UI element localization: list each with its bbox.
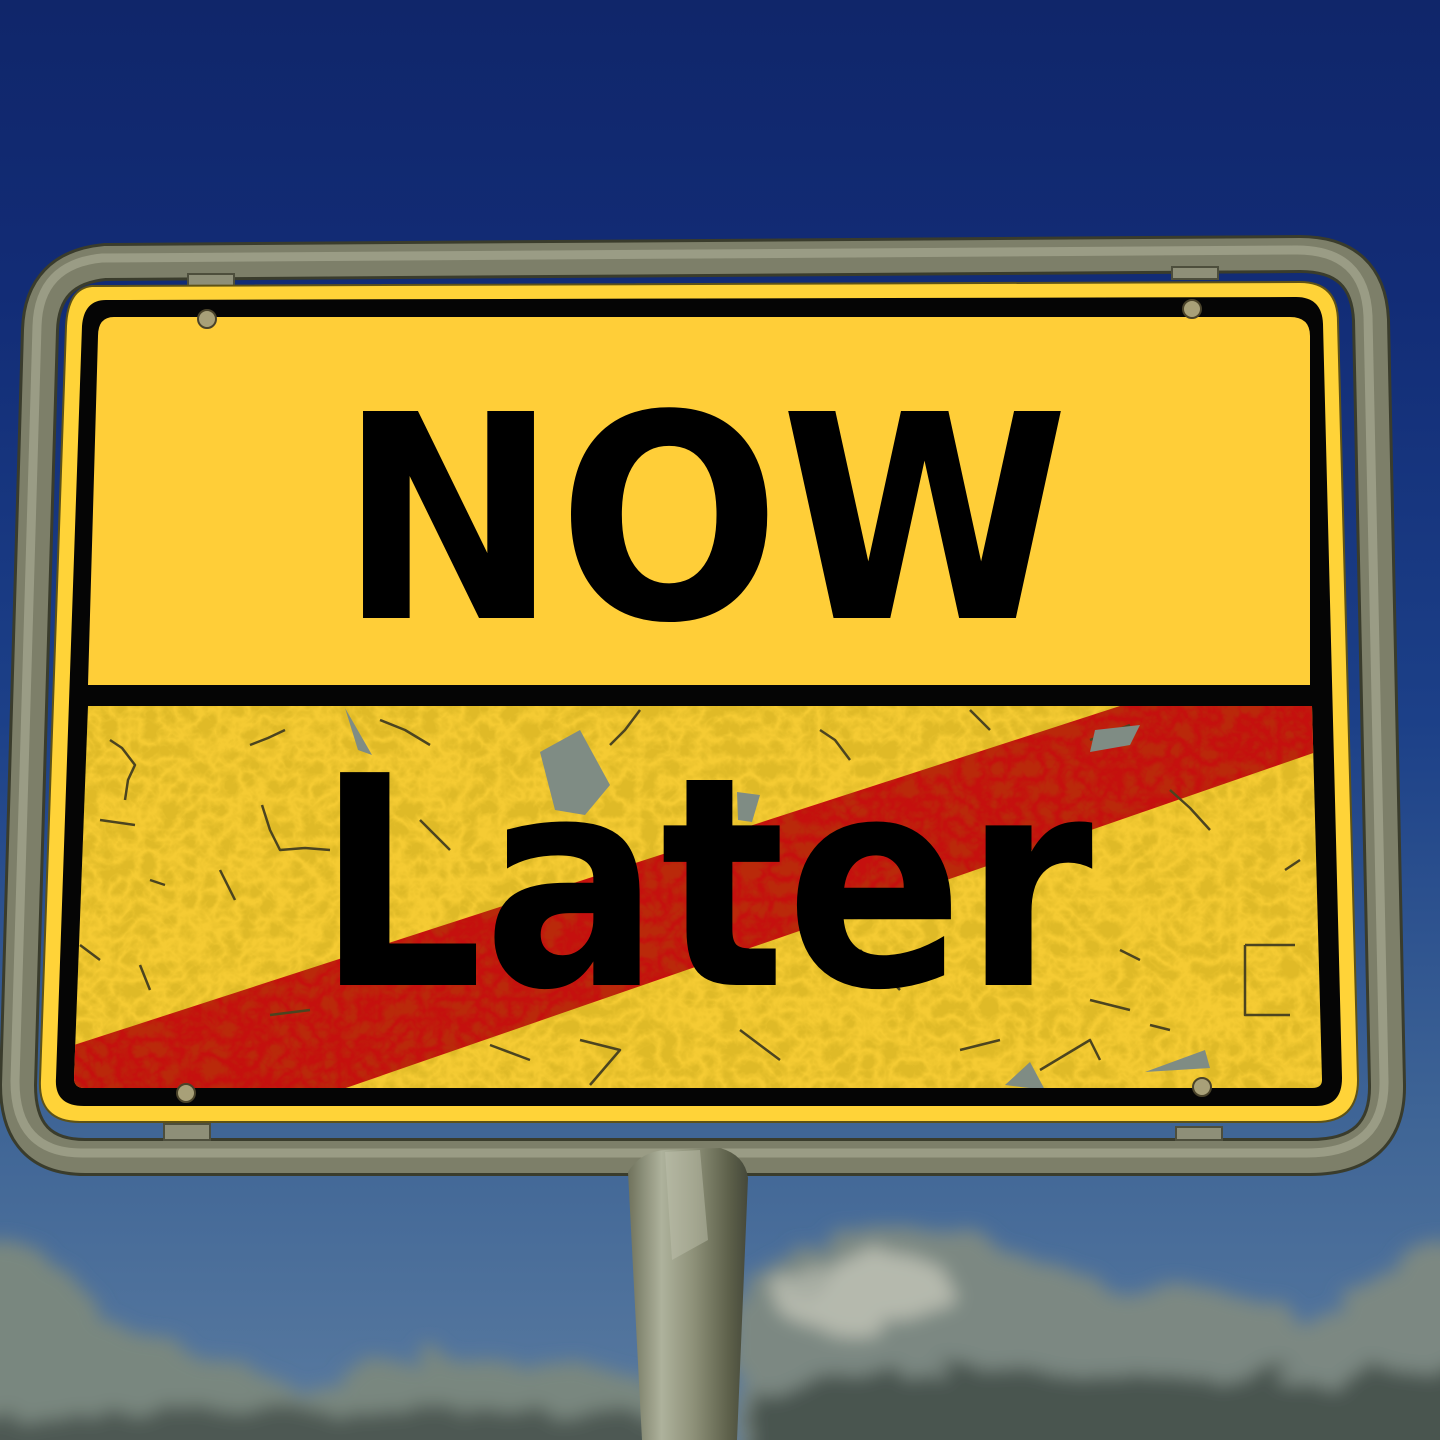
text: NOW: NOW [339,354,1069,685]
sign plate [40,282,1358,1122]
clouds [0,1223,1440,1440]
upper panel: NOW [88,317,1310,685]
black inner border [56,297,1342,1106]
paint cracks [80,710,1300,1085]
peeled paint patches [345,708,1210,1090]
mounting brackets [164,267,1222,1140]
screws [177,300,1211,1102]
lower panel: Later [70,700,1330,1095]
text: Later: Later [316,714,1095,1054]
metal frame [15,250,1387,1157]
red diagonal stripe [74,706,1322,1090]
post [628,1148,748,1440]
